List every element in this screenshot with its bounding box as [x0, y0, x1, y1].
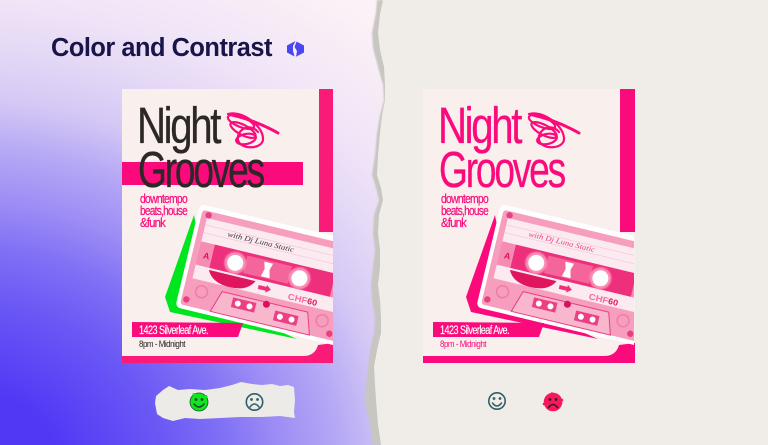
scribble — [527, 112, 579, 147]
poster background — [122, 89, 333, 363]
cassette tape illustration: A — [503, 250, 512, 262]
address banner — [433, 322, 544, 337]
poster background — [423, 89, 635, 363]
subtitle text: downtempo — [140, 192, 188, 206]
subtitle text: beats,house — [140, 204, 188, 218]
heading: Grooves: Grooves — [138, 141, 264, 198]
right accent bar — [319, 89, 333, 232]
cassette tape illustration — [477, 205, 634, 345]
heading: Night: Night — [438, 97, 522, 154]
time text: 8pm - Midnight — [440, 339, 487, 350]
address text: 1423 Silverleaf Ave. — [440, 325, 509, 337]
cassette tape illustration: with Dj Luna Static — [528, 229, 597, 254]
cassette tape illustration: CHF — [287, 291, 309, 306]
bottom corner shape — [423, 343, 635, 363]
cassette tape illustration: 60 — [607, 296, 620, 308]
right accent bar — [620, 89, 635, 232]
cassette offset shadow — [165, 215, 297, 339]
icon: highlighted happy face — [190, 393, 208, 411]
cassette tape illustration — [176, 205, 333, 345]
bottom corner shape — [122, 343, 333, 363]
subtitle text — [140, 192, 188, 230]
address text: 1423 Silverleaf Ave. — [139, 325, 208, 337]
scribble — [226, 112, 278, 147]
icon: happy face — [489, 393, 505, 409]
cassette tape illustration: CHF — [588, 291, 610, 306]
highlight bar behind heading — [122, 162, 303, 185]
poster: high contrast version — [122, 89, 333, 363]
title: Color and Contrast — [51, 34, 273, 62]
heading: Night: Night — [137, 97, 221, 154]
icon: logo — [287, 41, 304, 57]
address banner — [132, 322, 243, 337]
heading: Grooves: Grooves — [439, 141, 565, 198]
icon: sad face — [246, 394, 263, 410]
time text: 8pm - Midnight — [139, 339, 186, 350]
cassette offset shadow — [466, 215, 598, 339]
subtitle text: downtempo — [441, 192, 489, 206]
subtitle text — [441, 192, 489, 230]
subtitle text: beats,house — [441, 204, 489, 218]
cassette tape illustration: with Dj Luna Static — [227, 229, 296, 254]
subtitle text: &funk — [140, 216, 166, 230]
background: purple gradient panel — [0, 0, 400, 445]
cassette tape illustration: A — [202, 250, 211, 262]
subtitle text: &funk — [441, 216, 467, 230]
cassette tape illustration: 60 — [306, 296, 319, 308]
poster: low contrast version — [423, 89, 635, 363]
torn paper panel — [365, 0, 768, 445]
torn paper strip — [155, 382, 295, 421]
icon: highlighted sad face — [543, 392, 563, 411]
